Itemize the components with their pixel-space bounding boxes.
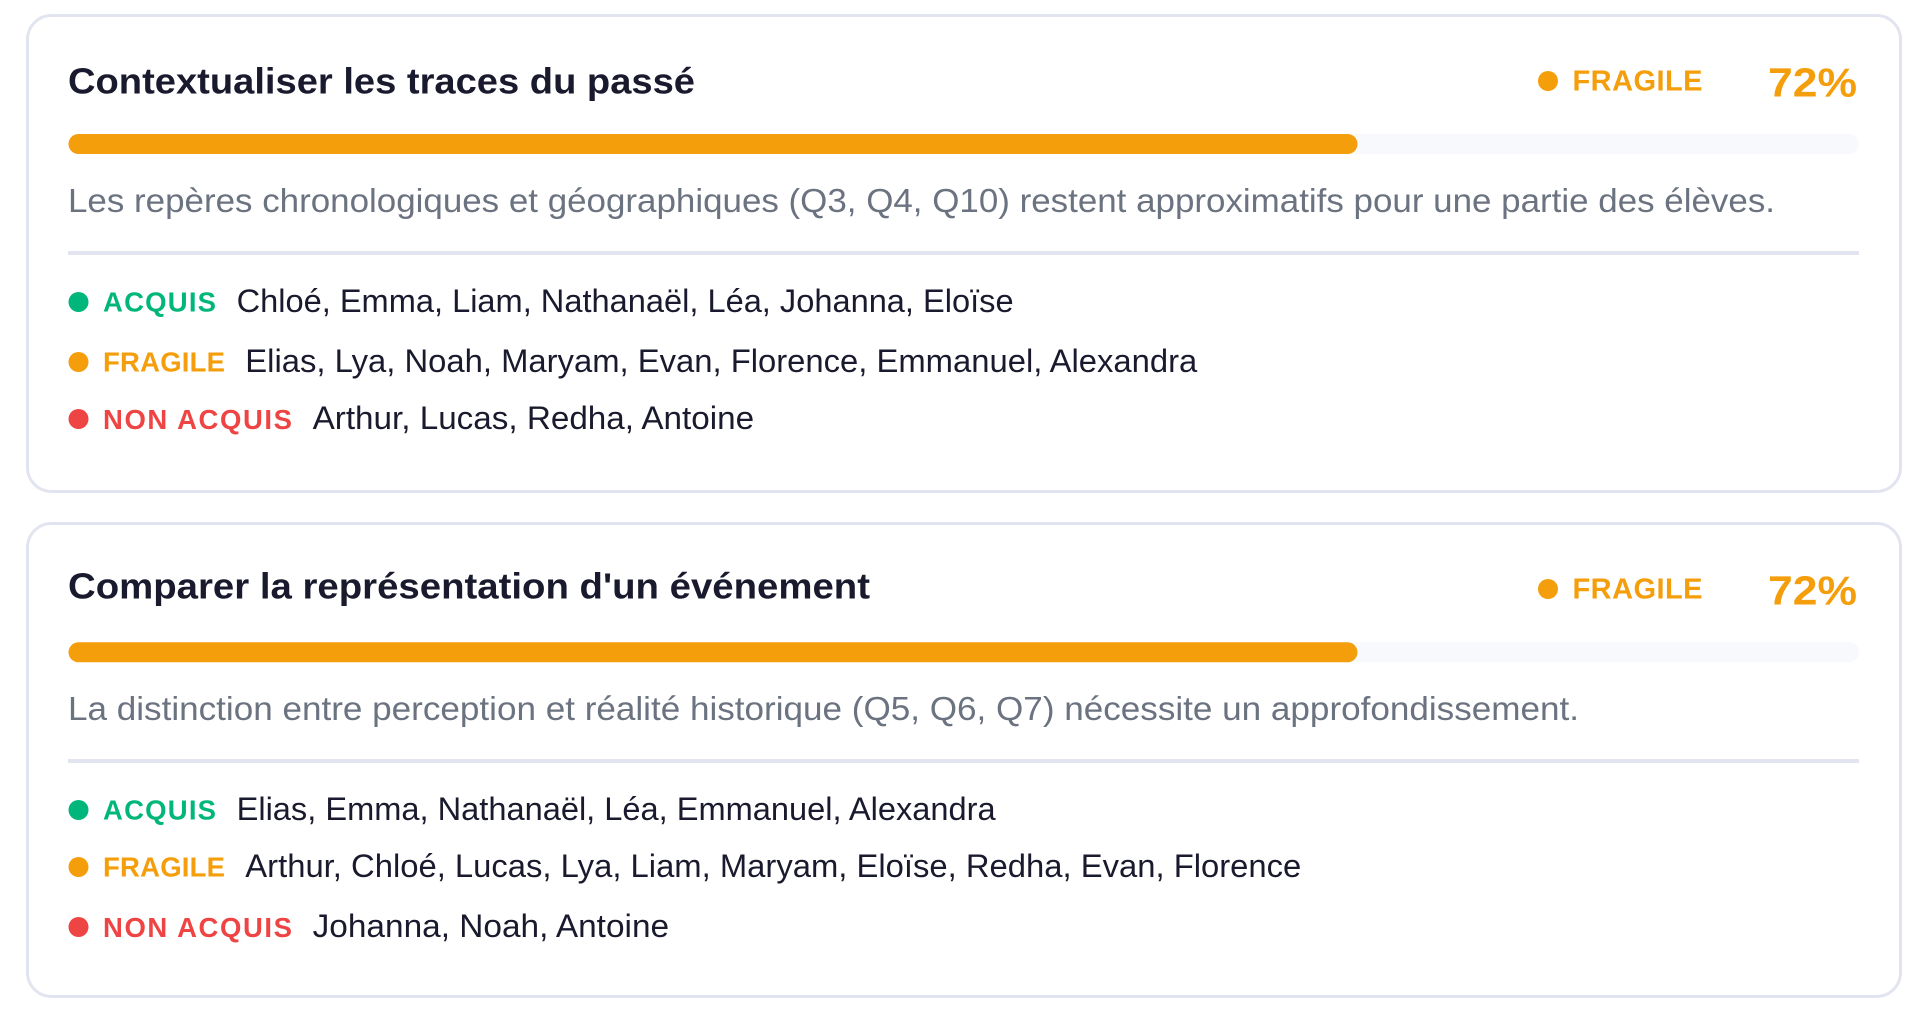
progress bar	[68, 642, 1859, 662]
row: fragile: Arthur, Chloé, Lucas, Lya, Liam, Maryam, Eloïse, Redha, Evan, Florence	[245, 848, 1301, 884]
row: acquis: ACQUIS	[103, 794, 216, 826]
progress bar	[68, 134, 1859, 154]
row: fragile: FRAGILE	[103, 852, 225, 882]
row: acquis: Chloé, Emma, Liam, Nathanaël, Léa, Johanna, Eloïse	[237, 283, 1014, 319]
row: non acquis	[68, 400, 754, 436]
row: non acquis: NON ACQUIS	[103, 404, 292, 435]
description: La distinction entre perception et réalité historique (Q5, Q6, Q7) nécessite un approfondissement.	[68, 690, 1579, 727]
row: non acquis: NON ACQUIS	[103, 912, 292, 943]
percentage: 72%	[1768, 60, 1857, 106]
row: non acquis: Arthur, Lucas, Redha, Antoine	[313, 400, 754, 436]
row: non acquis	[68, 908, 669, 944]
row: acquis: Elias, Emma, Nathanaël, Léa, Emmanuel, Alexandra	[237, 791, 996, 827]
status badge: fragile: FRAGILE	[1572, 66, 1702, 98]
heading: Comparer la représentation d'un événement	[68, 566, 870, 607]
status badge: fragile: FRAGILE	[1572, 574, 1702, 606]
heading: Contextualiser les traces du passé	[68, 60, 695, 101]
row: acquis: ACQUIS	[103, 286, 216, 318]
row: non acquis: Johanna, Noah, Antoine	[313, 908, 669, 944]
percentage: 72%	[1768, 568, 1857, 614]
description: Les repères chronologiques et géographiques (Q3, Q4, Q10) restent approximatifs pour une partie des élèves.	[68, 182, 1775, 219]
row: fragile: FRAGILE	[103, 346, 225, 378]
row: fragile: Elias, Lya, Noah, Maryam, Evan, Florence, Emmanuel, Alexandra	[245, 343, 1198, 379]
panel: Contextualiser les traces du passé	[28, 16, 1900, 492]
panel: Comparer la représentation d'un événement	[28, 524, 1900, 996]
